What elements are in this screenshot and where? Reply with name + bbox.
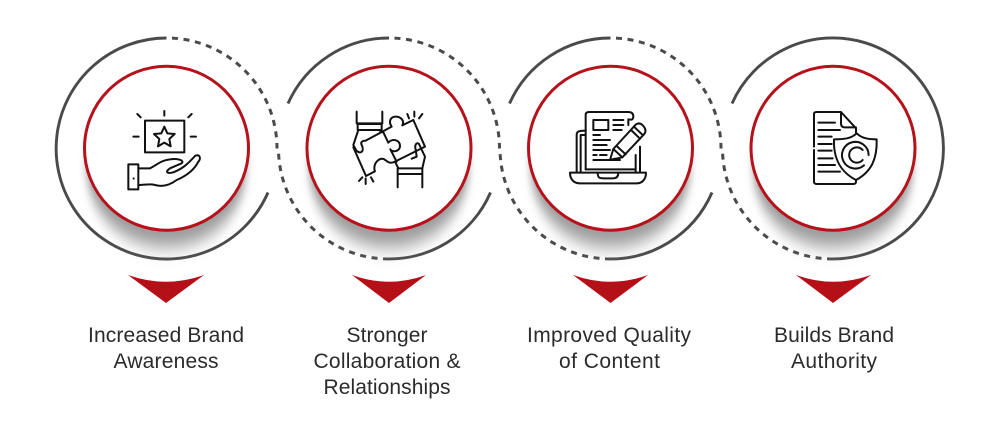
arrow: [573, 275, 648, 303]
inner circle with shadow: [528, 66, 692, 247]
label: [88, 324, 244, 373]
label: Relationships: [324, 376, 450, 399]
label: Increased Brand: [88, 324, 244, 347]
ring: second circle outline: [278, 38, 500, 259]
panel: builds brand authority: [722, 38, 943, 373]
label: Improved Quality: [527, 324, 692, 347]
panel: stronger collaboration and relationships: [278, 38, 500, 399]
inner circle with shadow: [84, 66, 248, 247]
inner circle with shadow: [307, 66, 471, 247]
icon: laptop with document and pencil: [570, 112, 646, 183]
arrow: [796, 275, 871, 303]
arrow: [128, 275, 204, 303]
inner circle with shadow: [751, 66, 915, 247]
label: Authority: [791, 350, 878, 373]
label: of Content: [559, 350, 660, 373]
icon: hand holding star: [128, 111, 200, 189]
icon: document with copyright shield: [814, 112, 877, 184]
arrow: [352, 275, 426, 303]
panel: increased brand awareness: [56, 38, 277, 373]
ring: fourth circle outline: [722, 38, 943, 259]
ring: first circle outline: [56, 38, 277, 259]
label: Builds Brand: [774, 324, 894, 347]
label: Awareness: [114, 350, 218, 373]
label: [527, 324, 692, 373]
label: Collaboration &: [314, 350, 460, 373]
label: [314, 324, 460, 399]
label: [774, 324, 894, 373]
ring: third circle outline: [500, 38, 721, 259]
panel: improved quality of content: [500, 38, 721, 373]
icon: hands joining puzzle: [353, 112, 425, 187]
label: Stronger: [346, 324, 428, 347]
